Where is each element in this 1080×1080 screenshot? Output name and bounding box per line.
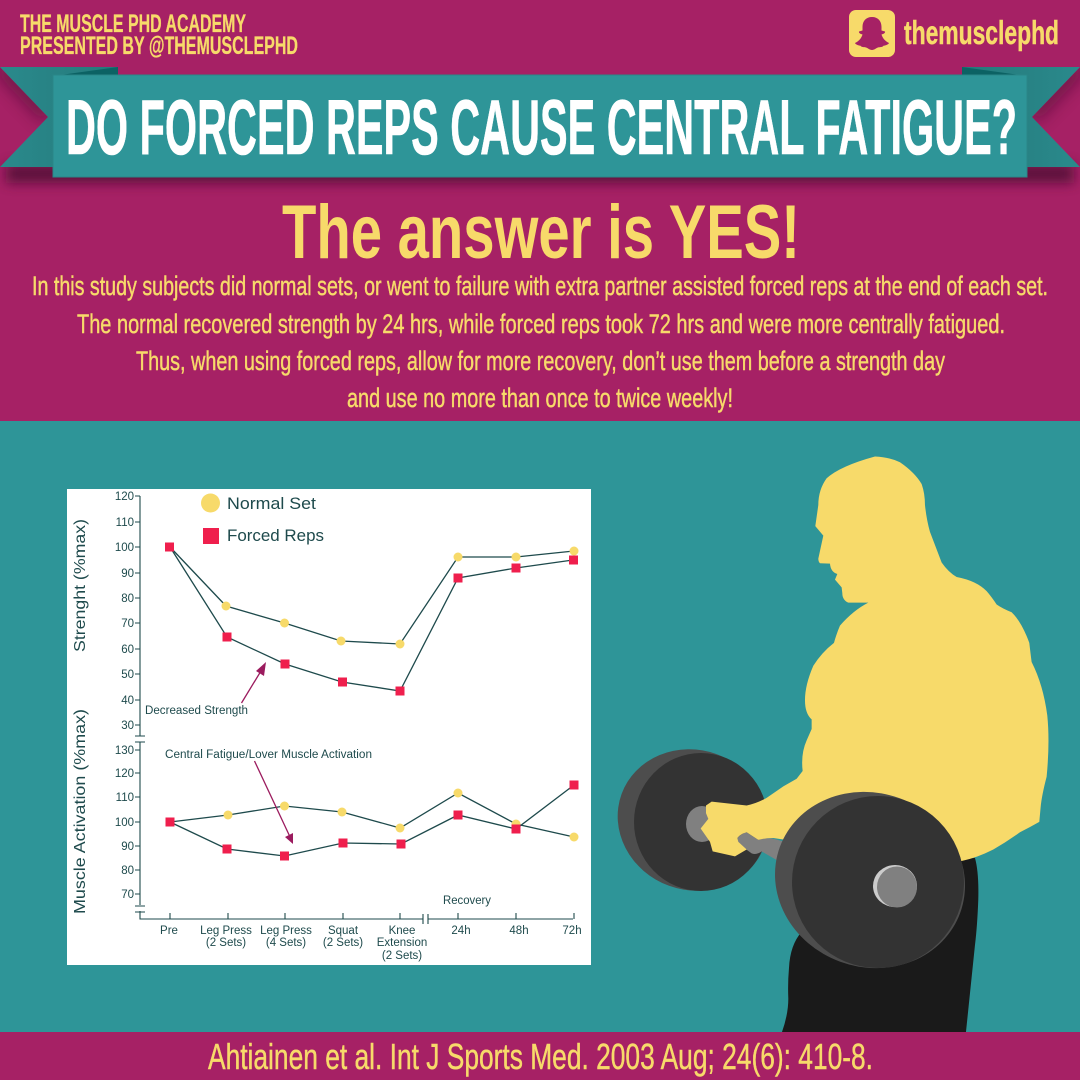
y axis labels: 110: [116, 517, 134, 529]
icon: snapchat ghost: [849, 10, 895, 57]
y axis title: strength: Strenght (%max): [72, 519, 89, 652]
x axis labels: 72h: [562, 925, 582, 937]
x axis labels: Squat: [328, 925, 359, 937]
header: academy text: THE MUSCLE PHD ACADEMY: [20, 10, 246, 38]
activation lines: [170, 785, 574, 856]
plate hub: [873, 865, 917, 908]
x axis labels: 24h: [451, 925, 471, 937]
torso, head and arm silhouette: [701, 456, 1048, 861]
footer band: [0, 1032, 1080, 1080]
ribbon right tail: [962, 67, 1080, 167]
activation normal set markers: [224, 788, 578, 842]
explanatory text: [32, 271, 1048, 413]
y axis labels: 70: [121, 889, 134, 901]
right weight plate: [750, 765, 990, 995]
y axis labels: 40: [121, 695, 134, 707]
x axis labels: Leg Press: [200, 925, 252, 937]
header: academy text: [20, 10, 298, 60]
y axis labels: 100: [115, 817, 134, 829]
title ribbon: [0, 67, 1080, 183]
snapchat handle: [849, 10, 1059, 57]
annotation: decreased strength: Decreased Strength: [145, 705, 248, 717]
y axis labels: 60: [121, 644, 134, 656]
annotation: central fatigue: Central Fatigue/Lover Muscle Activation: [165, 749, 372, 761]
explanatory text: and use no more than once to twice weekly!: [347, 383, 733, 413]
x axis labels: (2 Sets): [323, 937, 363, 949]
pants: [782, 858, 978, 1032]
y axis labels: 130: [115, 745, 134, 757]
ribbon shadows: [0, 67, 1080, 183]
x axis labels: (4 Sets): [266, 937, 306, 949]
y axis title: muscle activation: Muscle Activation (%max): [72, 709, 89, 914]
y axis labels: 120: [115, 768, 134, 780]
bodybuilder illustration: [598, 456, 1048, 1032]
y axis labels: 110: [116, 792, 134, 804]
strength normal set markers: [222, 546, 578, 648]
legend: [201, 494, 324, 545]
teal panel background: [0, 421, 1080, 1032]
x axis labels: [160, 925, 582, 962]
x axis labels: (2 Sets): [382, 950, 422, 962]
annotation: recovery: Recovery: [443, 895, 491, 907]
x axis labels: Extension: [377, 937, 427, 949]
chart axes: [135, 496, 574, 924]
ribbon left fold: [53, 67, 118, 76]
y axis labels: 100: [115, 542, 134, 554]
x axis labels: Knee: [389, 925, 415, 937]
y axis labels: 120: [115, 491, 134, 503]
x axis labels: 48h: [509, 925, 529, 937]
header: academy text: PRESENTED BY @THEMUSCLEPHD: [20, 32, 298, 60]
x axis labels: Leg Press: [260, 925, 312, 937]
strength forced reps markers: [165, 542, 578, 696]
y axis labels: 50: [121, 669, 134, 681]
ribbon right fold: [962, 67, 1027, 76]
arrow: decreased strength: [242, 662, 266, 703]
barbell bar: [737, 832, 785, 861]
strength lines: [170, 547, 574, 691]
legend: Forced Reps: [227, 527, 324, 545]
ribbon left tail: [0, 67, 118, 167]
ribbon band: [53, 75, 1027, 177]
y axis labels: 80: [121, 865, 134, 877]
legend: Normal Set: [227, 495, 316, 513]
y axis labels: 90: [121, 568, 134, 580]
left weight plate: [598, 728, 788, 912]
chart panel: [67, 489, 591, 965]
activation forced reps markers: [166, 780, 578, 860]
arrow: central fatigue: [254, 761, 293, 844]
answer heading: The answer is YES!: [282, 190, 800, 275]
y axis labels: [115, 491, 134, 901]
top panel background: [0, 0, 1080, 421]
y axis labels: 90: [121, 841, 134, 853]
y axis labels: 30: [121, 720, 134, 732]
y axis labels: 80: [121, 593, 134, 605]
x axis labels: Pre: [160, 925, 178, 937]
x axis labels: (2 Sets): [206, 937, 246, 949]
y axis labels: 70: [121, 618, 134, 630]
